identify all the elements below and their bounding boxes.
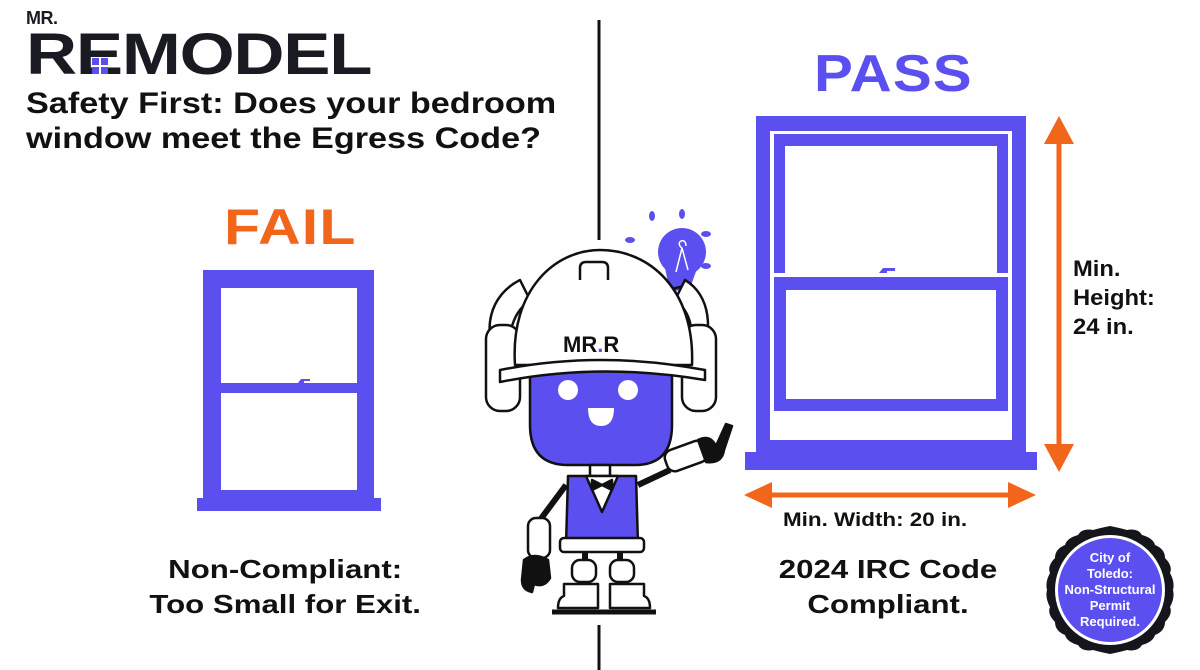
mascot: MR.R xyxy=(563,332,619,357)
logo: MR. xyxy=(26,8,58,28)
ear muffs xyxy=(490,280,530,370)
height label xyxy=(1073,256,1155,339)
height label: Height: xyxy=(1073,285,1155,310)
fail caption xyxy=(149,554,421,619)
right arm xyxy=(638,470,670,485)
fail window xyxy=(197,270,381,511)
headline: Safety First: Does your bedroom xyxy=(26,87,556,120)
neck xyxy=(590,465,610,477)
badge xyxy=(1046,526,1174,654)
pass caption: Compliant. xyxy=(807,589,969,619)
lightbulb xyxy=(625,209,711,296)
badge text: Toledo: xyxy=(1087,566,1133,581)
fail caption: Non-Compliant: xyxy=(168,554,402,584)
pass caption: 2024 IRC Code xyxy=(779,554,997,584)
left arm xyxy=(540,485,566,520)
badge text: Non-Structural xyxy=(1064,582,1156,597)
helmet xyxy=(515,250,692,365)
legs xyxy=(585,552,620,582)
fail caption: Too Small for Exit. xyxy=(149,589,421,619)
arrow: width xyxy=(744,482,1036,508)
height label: 24 in. xyxy=(1073,314,1134,339)
logo: REMODEL xyxy=(26,22,371,87)
FAIL heading: FAIL xyxy=(224,199,357,255)
face xyxy=(530,360,672,465)
headline: window meet the Egress Code? xyxy=(26,122,541,155)
headline xyxy=(26,87,556,155)
mascot xyxy=(484,209,734,614)
badge text xyxy=(1064,550,1156,629)
body / vest xyxy=(566,476,638,545)
width label: Min. Width: 20 in. xyxy=(783,510,967,531)
height label: Min. xyxy=(1073,256,1121,281)
badge text: Permit xyxy=(1090,598,1130,613)
badge text: City of xyxy=(1090,550,1130,565)
PASS heading: PASS xyxy=(814,45,973,103)
badge text: Required. xyxy=(1080,614,1140,629)
arrow: height xyxy=(1044,116,1074,472)
pass window xyxy=(745,116,1037,470)
pass caption xyxy=(779,554,997,619)
belt xyxy=(560,538,644,552)
